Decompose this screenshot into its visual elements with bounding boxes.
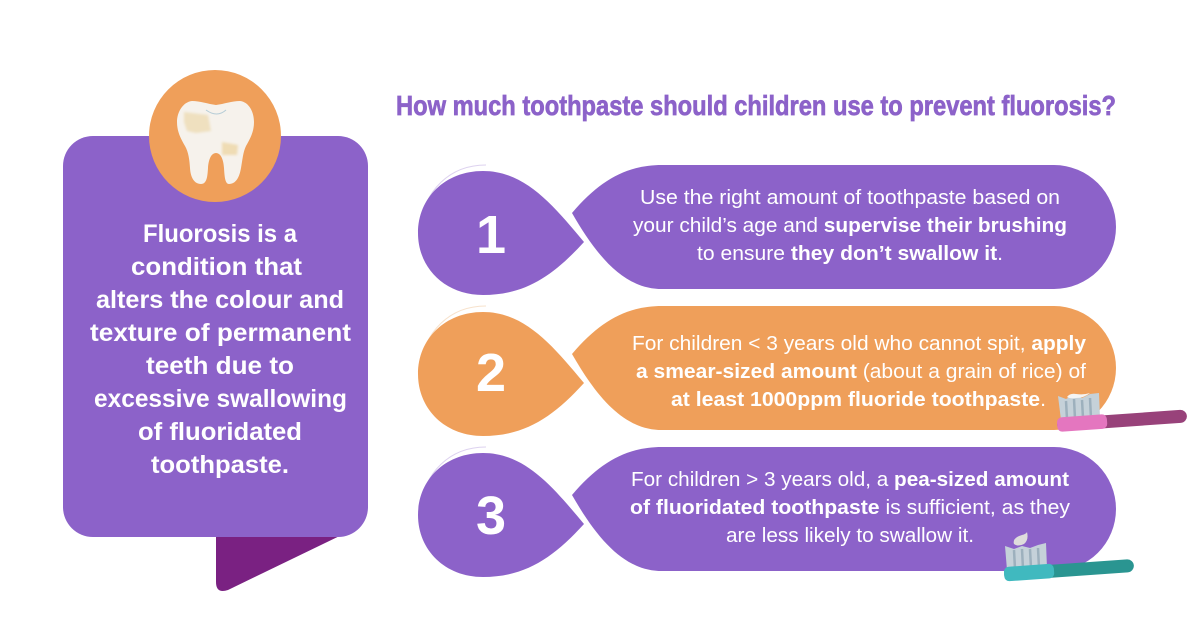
step 1 text	[633, 187, 1067, 265]
card text: condition that	[131, 253, 303, 281]
step 1 number teardrop	[418, 171, 584, 295]
step 3 number teardrop	[418, 453, 584, 577]
card text: teeth due to	[146, 352, 294, 380]
step 2 text: a smear-sized amount (about a grain of rice) of	[636, 361, 1086, 383]
card text: Fluorosis is a	[143, 220, 298, 248]
panel: step 2	[418, 306, 1187, 436]
step 1 text: your child’s age and supervise their brushing	[633, 215, 1067, 237]
step 3 text: are less likely to swallow it.	[726, 525, 974, 547]
card text	[90, 220, 352, 479]
panel: step 3	[418, 447, 1134, 582]
speech bubble tail	[216, 530, 352, 591]
card text: texture of permanent	[90, 319, 352, 347]
step 1 text: Use the right amount of toothpaste based on	[640, 187, 1060, 209]
panel: step 1	[418, 165, 1116, 295]
step 3 number: 3	[476, 486, 506, 546]
step 1 text pill	[572, 165, 1116, 289]
step 3 text pill	[572, 447, 1116, 571]
icon: teal toothbrush	[1004, 532, 1134, 582]
step 3 text	[630, 469, 1070, 547]
card text: alters the colour and	[96, 286, 344, 314]
icon: orange circle with tooth	[149, 70, 281, 202]
card text: toothpaste.	[151, 451, 289, 479]
step 2 text	[632, 333, 1087, 411]
step 3 text: For children > 3 years old, a pea-sized amount	[631, 469, 1069, 491]
step 2 text pill	[572, 306, 1116, 430]
icon: pink toothbrush	[1057, 393, 1187, 432]
step 2 number teardrop	[418, 312, 584, 436]
panel: fluorosis definition card	[63, 70, 368, 591]
step 2 number: 2	[476, 343, 506, 403]
step 2 text: at least 1000ppm fluoride toothpaste .	[671, 389, 1046, 411]
step 3 text: of fluoridated toothpaste is sufficient, as they	[630, 497, 1070, 519]
step 1 text: to ensure they don’t swallow it .	[697, 243, 1003, 265]
card background	[63, 136, 368, 537]
card text: of fluoridated	[138, 418, 302, 446]
step 1 number: 1	[476, 205, 506, 265]
step 2 text: For children < 3 years old who cannot spit, apply	[632, 333, 1087, 355]
card text: excessive swallowing	[94, 385, 347, 413]
